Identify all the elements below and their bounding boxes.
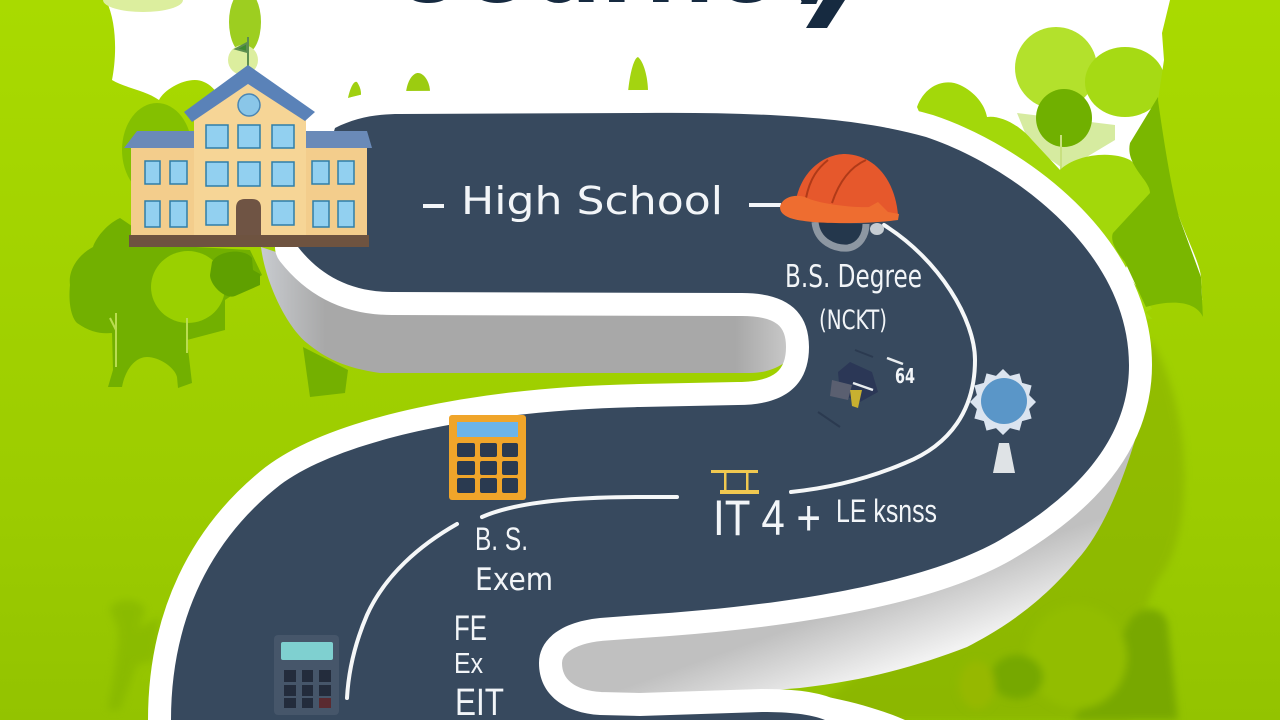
small dark tree [991,655,1043,699]
icon: medal [970,369,1036,473]
label: NCKT: (NCKT) [819,305,887,336]
flag halo foliage [228,45,258,75]
label: B.S. Degree: B.S. Degree [785,259,922,295]
icon: hard hat [780,154,899,248]
tall dome leaf [628,57,648,92]
label: Ex: Ex [454,648,483,680]
round window [238,94,260,116]
road shadow lower [554,440,1135,700]
lumps beside road [917,82,1160,320]
central block [194,84,306,236]
right dash [749,203,781,207]
title fragment [400,0,845,28]
left tree trunks [110,313,187,367]
right wing roof [306,131,372,148]
top left pale foliage [103,0,183,12]
lime tree large [1015,27,1097,109]
label: B. S.: B. S. [475,521,528,557]
left wing roof [124,131,194,148]
label: LE: LE ksnss [836,493,937,529]
screen [457,422,518,437]
body [274,635,339,715]
right tree cluster [917,0,1280,350]
heading text: High School [461,179,723,223]
base [129,235,369,247]
label: IT 4 +: IT 4 + [713,490,821,546]
small leaf left [348,82,361,98]
route line: exam to EIT [347,524,457,698]
label: High School [423,179,781,223]
pale halo [1017,113,1115,170]
right column [1146,0,1280,350]
wings [131,148,367,236]
door [236,199,261,236]
main roof [184,65,315,122]
upper left dark tree [122,103,192,197]
road border end [760,689,905,720]
lime tree medium [1085,47,1165,117]
dark round tree [1036,89,1092,147]
small dome leaf [406,73,430,92]
trunk [1060,135,1062,170]
top leaf [229,0,261,54]
body [449,415,526,500]
icon: small figure [818,350,903,427]
blue centre [981,378,1027,424]
left small dark tree [210,252,260,297]
faint lower right trees [959,605,1178,720]
keys [284,670,331,708]
road white border [171,113,1129,720]
white ticks [853,358,903,390]
left light tree [151,251,225,323]
light front tree [1027,605,1127,709]
muted block [830,380,852,400]
ridges [806,160,866,203]
y tail [806,0,845,28]
left dark tree group [69,218,262,388]
flag [236,37,248,66]
left dash [423,204,444,208]
dark back tree [1073,609,1178,720]
right post [746,470,748,492]
brim [780,196,899,223]
road [171,113,1129,720]
top bar [711,470,758,473]
icon: school [124,37,372,247]
road shadow upper [261,247,800,373]
small tree under road [303,347,348,397]
small olive tree [959,661,995,709]
label: Exem: Exem [475,562,553,598]
screen [281,642,333,660]
yellow block [850,390,862,408]
ribbon [993,443,1015,473]
windows [145,125,354,227]
strap knob [870,223,884,235]
faint lower left tree [108,600,160,710]
left post [724,470,726,492]
dark shape [838,362,878,402]
label: 64: 64 [895,364,915,388]
icon: orange calculator [449,415,526,500]
icon: grey calculator [274,635,339,715]
shade under road right [800,340,1184,720]
icon: yellow rail [711,470,759,494]
keys [457,443,518,493]
dome [795,154,898,215]
chin strap [815,222,866,248]
bottom bar [720,490,759,494]
shadow strokes [818,350,873,427]
star [970,369,1036,435]
route line: helmet to IT [791,225,975,492]
route line: IT to calculator [482,497,677,517]
label: FE: FE [454,609,487,648]
dark column [1112,97,1203,317]
